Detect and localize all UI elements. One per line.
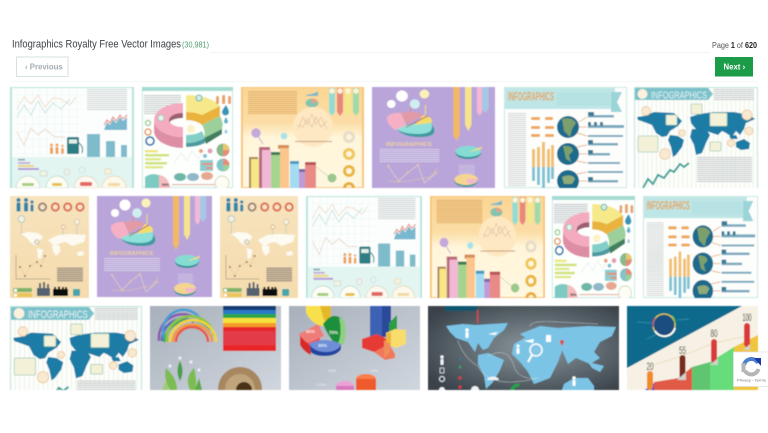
thumbnail: diagonal growth chart: 80 bbox=[710, 328, 718, 340]
globes copy title: INFOGRAPHICS bbox=[647, 199, 690, 213]
thumbnail: diagonal growth chart bbox=[626, 305, 759, 391]
donut copy percentage: 50% bbox=[570, 293, 577, 297]
page heading: (30,981) bbox=[182, 40, 209, 50]
thumbnail: line charts copy bbox=[306, 196, 422, 298]
thumbnail: 3D pie and blocks on gray: 70% bbox=[329, 330, 338, 335]
next button bbox=[715, 57, 753, 76]
thumbnail: line charts and fuel pump bbox=[10, 86, 134, 188]
purple copy title: INFOGRAPHICS bbox=[110, 251, 153, 257]
page counter: Page 1 of 620 bbox=[712, 41, 757, 50]
thumbnail: globes copy bbox=[642, 196, 758, 299]
thumbnail: 3D pie and blocks on gray: 5.5% bbox=[317, 382, 327, 387]
thumbnail: globes and bars: INFOGRAPHICS bbox=[508, 90, 554, 104]
thumbnail: 3D pie and blocks on gray: 13% bbox=[328, 368, 336, 373]
thumbnail: 3D pie and blocks on gray: 13% bbox=[370, 368, 378, 373]
thumbnail: 3D pie and blocks on gray bbox=[288, 305, 420, 391]
thumbnail: 3D bar chart on orange bbox=[240, 86, 365, 189]
purple thumbnail title: INFOGRAPHICS bbox=[386, 142, 432, 148]
thumbnail: 3D pie and blocks on gray: 60% bbox=[306, 329, 315, 334]
thumbnail: beige world map copy bbox=[220, 196, 298, 298]
thumbnail: purple infographic with pie chart bbox=[372, 86, 496, 188]
map copy title: INFOGRAPHICS bbox=[28, 309, 88, 321]
thumbnail: bar chart copy bbox=[429, 195, 546, 299]
page heading: Infographics Royalty Free Vector Images bbox=[12, 38, 181, 50]
thumbnail: 3D donut chart bbox=[142, 86, 234, 189]
reCAPTCHA badge: Privacy - Terms bbox=[737, 378, 766, 382]
thumbnail: diagonal growth chart: 55 bbox=[679, 345, 686, 357]
next button: Next › bbox=[724, 62, 746, 72]
previous button: ‹ Previous bbox=[25, 62, 63, 72]
thumbnail grid bbox=[10, 87, 758, 420]
donut chart percentage: 50% bbox=[162, 183, 170, 187]
reCAPTCHA icon bbox=[744, 358, 761, 374]
thumbnail: beige world map bbox=[10, 196, 90, 298]
thumbnail: world map copy cropped bbox=[10, 306, 142, 391]
previous button bbox=[16, 57, 68, 76]
reCAPTCHA badge bbox=[734, 352, 768, 386]
thumbnail: purple infographic copy bbox=[96, 195, 212, 298]
thumbnail: donut chart copy bbox=[552, 196, 636, 299]
thumbnail: blue world map on dark bbox=[427, 305, 620, 391]
thumbnail: 3D pie and blocks on gray: 30% bbox=[318, 343, 327, 348]
thumbnail: globes and bars bbox=[504, 86, 628, 189]
thumbnail: diagonal growth chart: 20 bbox=[646, 361, 654, 373]
thumbnail: world map teal bbox=[634, 86, 758, 189]
thumbnail: rainbow arcs on gray bbox=[150, 305, 282, 391]
map thumbnail title: INFOGRAPHICS bbox=[651, 90, 707, 102]
